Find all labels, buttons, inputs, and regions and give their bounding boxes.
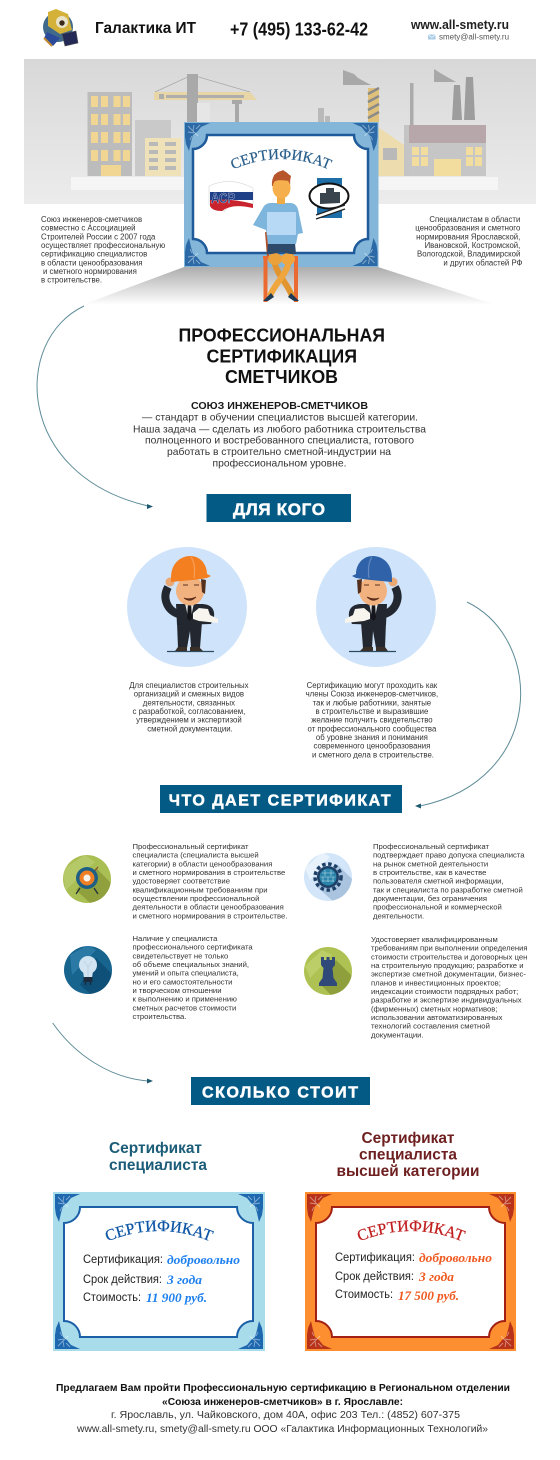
person with laptop [253, 170, 303, 302]
intro text right: нормирования Ярославской, [416, 232, 520, 241]
text: certificate benefit 3: строительства. [132, 1012, 186, 1021]
text: certificate benefit 4: технологий составления сметной [371, 1022, 490, 1031]
section heading: what the certificate gives [160, 785, 402, 813]
text: who can certify: в строительстве и выразившие [315, 707, 428, 716]
section heading: for whom: ДЛЯ КОГО [233, 500, 325, 519]
text: certificate benefit 1: Профессиональный сертификат [132, 842, 249, 851]
intro text left: в области ценообразования [41, 258, 142, 267]
circle: worker in blue helmet [316, 547, 436, 667]
text: certificate benefit 4: экспертизе сметной документации, бизнес- [371, 970, 526, 979]
intro paragraph [133, 400, 426, 470]
intro text left: Союз инженеров-сметчиков [41, 215, 142, 224]
icon: company logo [43, 9, 78, 46]
text: certificate benefit 4: требованиям при выполнении определения [371, 944, 528, 953]
company name: Галактика ИТ [95, 20, 196, 37]
text: certificate benefit 3: и творческом отношении [132, 986, 222, 995]
head [277, 195, 285, 204]
email: smety@all-smety.ru [439, 32, 509, 42]
text: certificate benefit 2: подтверждает право допуска специалиста [373, 851, 525, 860]
certificate card: top category: Стоимость: [335, 1289, 393, 1301]
certificate card: top category: 3 года [418, 1270, 454, 1284]
heading: specialist certificate [109, 1140, 207, 1174]
text: who can certify: об уровне знания и понимания [316, 733, 428, 742]
text: certificate benefit 4: разработке и экспертизе индивидуальных [371, 996, 522, 1005]
intro paragraph: работать в строительно сметной-индустрии на [167, 446, 391, 458]
text: certificate benefit 2: на рынок сметной деятельности [373, 859, 488, 868]
text: certificate benefit 2: документации, без ограничения [373, 894, 487, 903]
intro paragraph: Наша задача — сделать из любого работника строительства [133, 423, 426, 435]
text: for specialists: Для специалистов строительных [129, 681, 249, 690]
main title: СЕРТИФИКАЦИЯ [206, 346, 357, 366]
footer text: «Союза инженеров-сметчиков» в г. Ярославле: [162, 1396, 403, 1408]
section heading: what the certificate gives: ЧТО ДАЕТ СЕРТИФИКАТ [169, 792, 391, 810]
text: certificate benefit 1: категории) в области ценообразования [132, 859, 272, 868]
text: certificate benefit 2: деятельности. [373, 911, 424, 920]
card rows: Сертификация: [83, 1254, 163, 1266]
icon: envelope [428, 34, 436, 40]
card rows: Сертификация: [335, 1252, 415, 1264]
phone number: +7 (495) 133-62-42 [230, 20, 368, 40]
hero banner: city skyline [24, 59, 536, 204]
certificate card: top category: Срок действия: [335, 1271, 414, 1283]
text: certificate benefit 1: квалификационным требованиям при [132, 885, 268, 894]
icon: gear [304, 853, 352, 901]
certificate card: specialist: Стоимость: [83, 1292, 141, 1304]
logo: Association of Builders [209, 181, 253, 211]
footer text: Предлагаем Вам пройти Профессиональную сертификацию в Региональном отделении [56, 1382, 510, 1394]
text: who can certify: Сертификацию могут проходить как [307, 681, 438, 690]
text: certificate benefit 4: Удостоверяет квалифицированным [371, 935, 498, 944]
intro text left: осуществляет профессиональную [41, 241, 165, 250]
certificate card: specialist: 3 года [166, 1273, 202, 1287]
intro text left: совместно с Ассоциацией [41, 224, 136, 233]
certificate card: top category: добровольно [419, 1251, 492, 1265]
intro text right: Вологодской, Владимирской [417, 250, 520, 259]
section heading: for whom [206, 494, 351, 522]
text: certificate benefit 4: документации. [371, 1030, 424, 1039]
text: certificate benefit 4: (фирменных) сметных нормативов; [371, 1004, 498, 1013]
circle: worker in orange helmet [127, 547, 247, 667]
text: for specialists: деятельности, связанных [143, 698, 235, 707]
text: for specialists: сметной документации. [147, 724, 233, 733]
certificate card: specialist: добровольно [167, 1253, 240, 1267]
text: certificate benefit 3: об объеме специальных знаний, [132, 960, 249, 969]
intro text left: в строительстве. [41, 276, 102, 285]
ground strip [71, 177, 498, 190]
heading: top category certificate: специалиста [359, 1146, 457, 1164]
text: certificate benefit 4: стоимости строительства и договорных цен [371, 952, 527, 961]
corner ornaments [307, 1194, 514, 1349]
text: certificate benefit 2: профессиональной и коммерческой [373, 903, 502, 912]
footer text: www.all-smety.ru, smety@all-smety.ru ООО «Галактика Информационных Технологий» [76, 1423, 488, 1435]
card title: СЕРТИФИКАТ [358, 1220, 466, 1241]
text: certificate benefit 1: и сметного нормирования в строительстве. [132, 911, 287, 920]
factory right [318, 69, 486, 176]
intro text right: ценообразования и сметного [415, 224, 521, 233]
text: certificate benefit 1: осуществлении профессиональной [132, 894, 259, 903]
text: certificate benefit 1: и сметного нормирования в строительстве [132, 868, 285, 877]
text: who can certify: члены Союза инженеров-сметчиков, [306, 690, 438, 699]
footer text: г. Ярославль, ул. Чайковского, дом 40А, офис 203 Тел.: (4852) 607-375 [111, 1409, 460, 1421]
certificate title: СЕРТИФИКАТ [231, 149, 332, 169]
text: certificate benefit 3: но и его самостоятельности [132, 977, 232, 986]
card title: СЕРТИФИКАТ [106, 1220, 214, 1241]
logo: union of estimators [310, 178, 348, 219]
intro paragraph: профессиональном уровне. [212, 458, 346, 470]
floor [82, 267, 496, 305]
laptop [267, 212, 296, 235]
torso [253, 203, 303, 244]
text: certificate benefit 4: индексации стоимости подрядных работ; [371, 987, 518, 996]
text: who can certify: так и любые работники, занятые [313, 698, 431, 707]
text: certificate benefit 3: к выполнению и применению [132, 995, 237, 1004]
text: certificate benefit 3: сметных расчетов стоимости [132, 1003, 236, 1012]
certificate card: top category [305, 1192, 516, 1351]
legs [274, 260, 292, 296]
footer text [56, 1382, 510, 1435]
logo: Association of Builders: АСР [211, 190, 235, 207]
text: who can certify: современного ценообразования [314, 742, 430, 751]
text: who can certify: от профессионального сообщества [308, 724, 437, 733]
icon: target [63, 855, 111, 903]
corner ornaments [185, 123, 378, 266]
text: who can certify: и сметного дела в строительстве. [312, 750, 434, 759]
icon: chess rook [304, 947, 352, 995]
arrow: curve to "what it gives" [415, 602, 521, 808]
heading: specialist certificate: Сертификат [109, 1140, 202, 1157]
corner ornaments [55, 1194, 263, 1349]
main title: СМЕТЧИКОВ [225, 367, 338, 387]
skirt [267, 243, 296, 254]
text: certificate benefit 3: свидетельствует не только [132, 951, 228, 960]
text: certificate benefit 3: Наличие у специалиста [132, 934, 218, 943]
arrow: curve to "how much" [53, 1023, 153, 1084]
intro text left: и сметного нормирования [43, 267, 137, 276]
certificate card: top category: 17 500 руб. [398, 1289, 459, 1303]
arrow: curve to "for whom" [37, 306, 153, 509]
certificate card: specialist: 11 900 руб. [146, 1291, 207, 1305]
header [43, 9, 509, 46]
intro paragraph: СОЮЗ ИНЖЕНЕРОВ-СМЕТЧИКОВ [191, 400, 368, 412]
heading: top category certificate: высшей категории [336, 1163, 480, 1180]
text: for specialists: с разработкой, согласованием, [133, 707, 245, 716]
heading: top category certificate [336, 1130, 480, 1180]
intro text right: Специалистам в области [429, 215, 520, 224]
text: for specialists: организаций и смежных видов [134, 690, 244, 699]
intro text right: Ивановской, Костромской, [425, 241, 520, 250]
certificate frame [193, 135, 368, 253]
text: certificate benefit 2: пользователя сметной информации, [373, 877, 504, 886]
text: certificate benefit 4: планов и инвестиционных проектов; [371, 978, 501, 987]
chair [266, 232, 294, 257]
certificate card: specialist: Срок действия: [83, 1274, 162, 1286]
text: certificate benefit 2: в строительстве, как в качестве [373, 868, 486, 877]
text: certificate benefit 1: деятельности в области ценообразования [132, 903, 284, 912]
text: certificate benefit 1: специалиста (специалиста высшей [132, 851, 259, 860]
intro text left: сертификацию специалистов [41, 250, 147, 259]
intro text right: и других областей РФ [443, 258, 523, 267]
heading: specialist certificate: специалиста [109, 1157, 207, 1174]
heading: top category certificate: Сертификат [362, 1130, 455, 1147]
text: who can certify: желание получить свидетельство [311, 716, 433, 725]
section heading: how much: СКОЛЬКО СТОИТ [202, 1084, 358, 1102]
text: certificate benefit 4: использовании автоматизированных [371, 1013, 503, 1022]
text: for specialists: утверждением и экспертизой [136, 716, 242, 725]
certificate card: specialist [53, 1192, 265, 1351]
main title [178, 326, 385, 387]
intro text left: Строителей России с 2007 года [41, 232, 156, 241]
text: certificate benefit 4: на строительную продукцию; разработке и [371, 961, 524, 970]
main title: ПРОФЕССИОНАЛЬНАЯ [178, 326, 385, 346]
icon: light bulb [64, 946, 112, 994]
website: www.all-smety.ru [410, 17, 509, 32]
text: certificate benefit 2: Профессиональный сертификат [373, 842, 489, 851]
building left [88, 92, 181, 176]
crane [154, 74, 257, 124]
intro paragraph: — стандарт в обучении специалистов высшей категории. [142, 412, 418, 424]
certificate board [184, 122, 378, 267]
text: certificate benefit 3: умений и опыта специалиста, [132, 969, 239, 978]
section heading: how much [191, 1077, 370, 1105]
text: certificate benefit 2: так и специалиста по разработке сметной [373, 885, 523, 894]
text: certificate benefit 1: удостоверяет соответствие [132, 877, 230, 886]
intro paragraph: полноценного и востребованного специалиста, готового [145, 435, 414, 447]
text: certificate benefit 3: профессионального сертификата [132, 943, 253, 952]
